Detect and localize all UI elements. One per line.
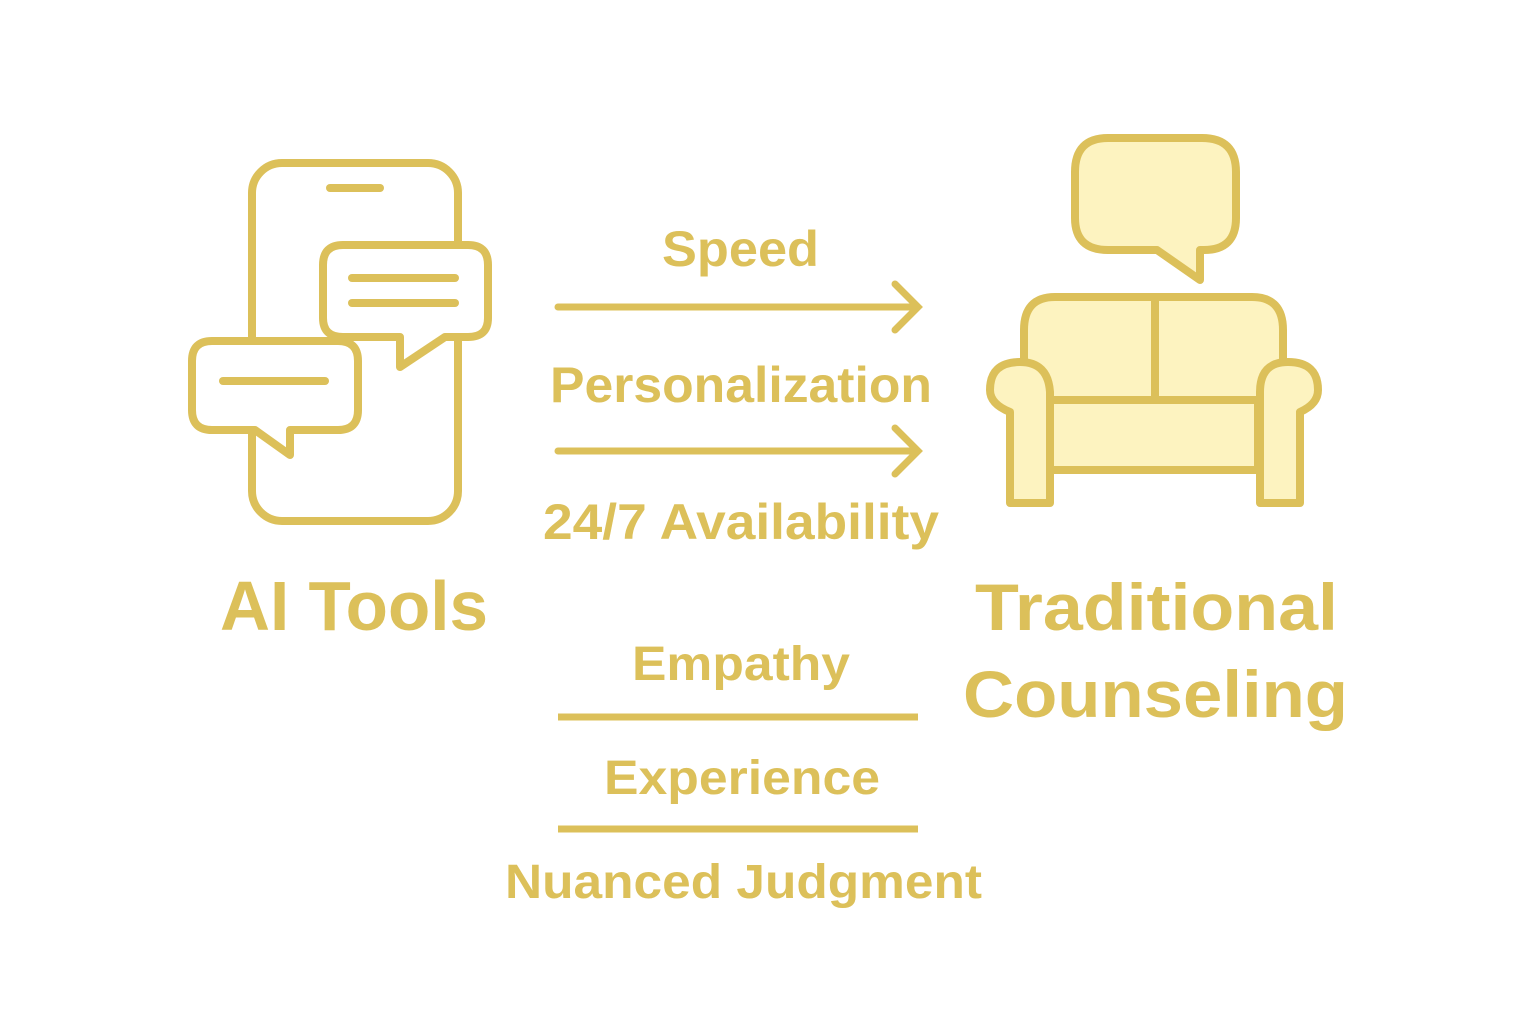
icon: speech bubble <box>1075 138 1236 280</box>
arrow: personalization <box>558 428 918 474</box>
title: Traditional Counseling <box>963 570 1348 731</box>
arrow: speed <box>558 284 918 330</box>
label: 24/7 Availability: 24/7 Availability <box>543 494 939 550</box>
label: Empathy: Empathy <box>632 638 850 691</box>
label: Nuanced Judgment: Nuanced Judgment <box>505 856 982 909</box>
icon: phone with chat bubbles <box>192 163 488 521</box>
title: AI Tools: AI Tools <box>220 567 488 645</box>
label: Speed: Speed <box>662 221 819 277</box>
title: Traditional Counseling: Counseling <box>963 657 1348 731</box>
title: Traditional Counseling: Traditional <box>975 570 1338 644</box>
label: Experience: Experience <box>604 752 880 805</box>
label: Personalization: Personalization <box>550 357 932 413</box>
icon: sofa <box>990 297 1318 503</box>
